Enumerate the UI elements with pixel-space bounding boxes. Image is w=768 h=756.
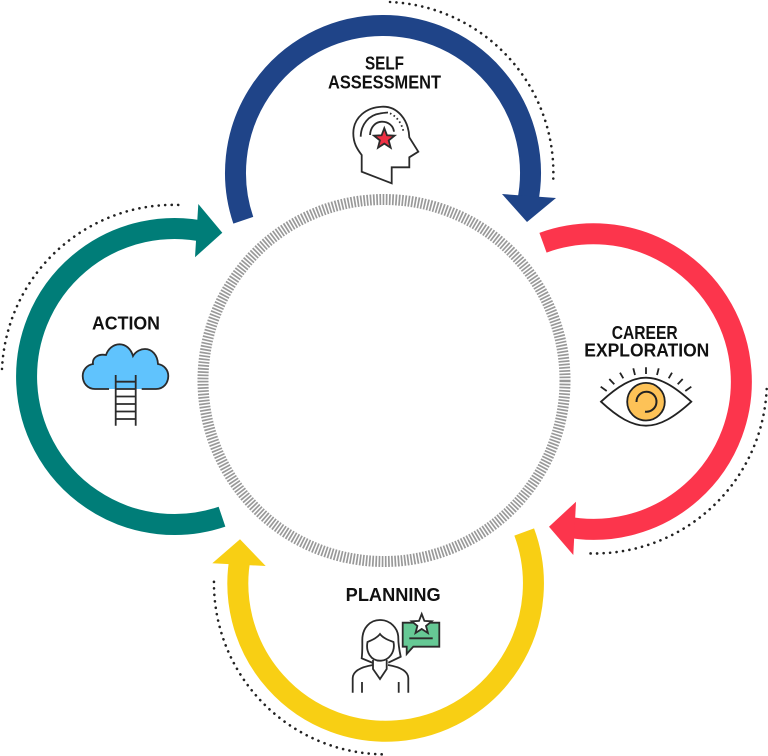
central hatched ring xyxy=(203,200,565,562)
heading: career exploration: CAREER xyxy=(612,323,678,343)
dotted arc: action xyxy=(2,205,181,369)
heading: career exploration xyxy=(584,323,709,361)
heading: career exploration: EXPLORATION xyxy=(584,341,709,361)
heading: self assessment: SELF xyxy=(365,53,404,73)
heading: action: ACTION xyxy=(92,313,160,333)
dotted arc: planning xyxy=(214,579,382,754)
arrow: self assessment (blue) xyxy=(235,25,556,222)
heading: self assessment: ASSESSMENT xyxy=(328,72,441,92)
icon: head with star xyxy=(353,107,418,183)
icon: cloud with ladder xyxy=(83,344,168,426)
dotted arc: self assessment xyxy=(390,2,553,184)
heading: planning: PLANNING xyxy=(346,585,441,605)
dotted arc: career exploration xyxy=(587,389,767,553)
arrow: career exploration (red) xyxy=(543,234,741,555)
arrow: action (teal) xyxy=(27,204,222,525)
icon: eye xyxy=(601,367,691,426)
icon: person with speech bubble xyxy=(353,614,439,693)
heading: self assessment xyxy=(328,53,441,92)
arrow: planning (yellow) xyxy=(212,532,533,731)
